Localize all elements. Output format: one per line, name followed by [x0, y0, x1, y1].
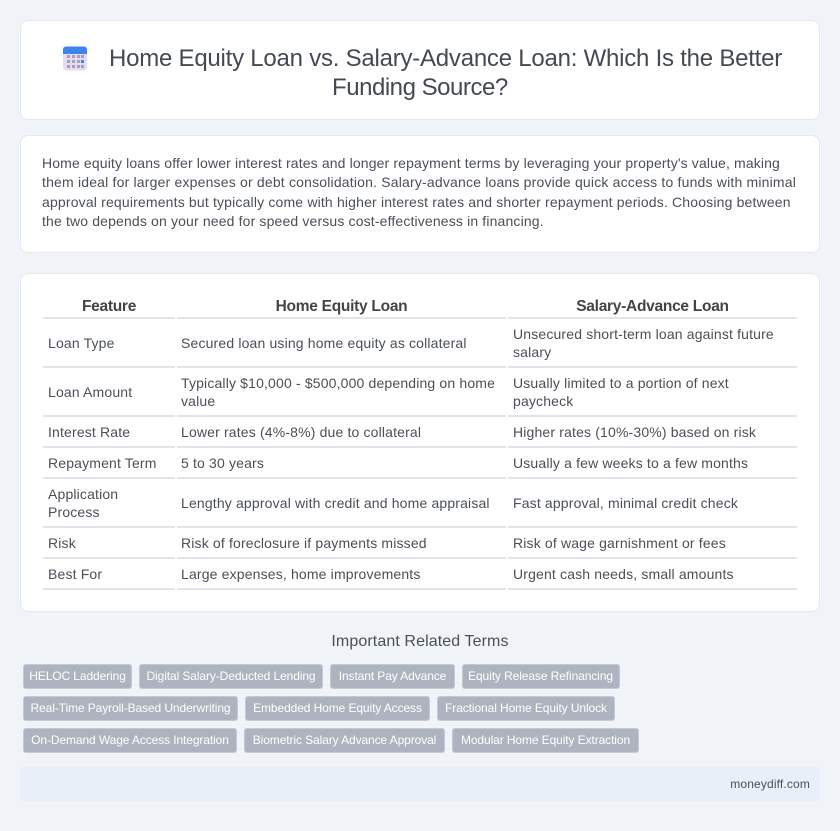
panel: summary [20, 135, 820, 253]
tag group: related terms: Digital Salary-Deducted Lending [146, 669, 316, 683]
table heading: home equity loan: Home Equity Loan [276, 298, 407, 315]
text: Usually limited to a portion of next [513, 375, 729, 391]
summary text: the two depends on your need for speed versus cost-effectiveness in financing. [42, 213, 544, 229]
summary text: approval requirements but typically come with higher interest rates and shorter repayment periods. Choosing between [42, 194, 791, 210]
text: paycheck [513, 393, 573, 409]
tag group: related terms: Biometric Salary Advance Approval [253, 733, 436, 747]
table heading: salary-advance loan: Salary-Advance Loan [576, 298, 729, 315]
heading: related terms: Important Related Terms [331, 633, 509, 650]
title [109, 45, 782, 101]
text: Lengthy approval with credit and home appraisal [181, 495, 490, 511]
tag group: related terms: Fractional Home Equity Unlock [445, 701, 607, 715]
row: repayment term: Repayment Term [48, 455, 157, 471]
row: application process [48, 486, 118, 520]
row: best for: Best For [48, 566, 102, 582]
text: Usually a few weeks to a few months [513, 455, 748, 471]
summary text: them ideal for larger expenses or debt consolidation. Salary-advance loans provide quick access to funds with minimal [42, 174, 796, 190]
row: application process: Application [48, 486, 118, 502]
row: loan amount: Loan Amount [48, 384, 132, 400]
title: Funding Source? [332, 74, 508, 101]
text: value [181, 393, 215, 409]
footer source: moneydiff.com [730, 777, 810, 791]
text: Secured loan using home equity as collateral [181, 335, 467, 351]
row: application process: Process [48, 504, 100, 520]
row: loan type: Loan Type [48, 335, 115, 351]
panel: header [20, 20, 820, 120]
text: Urgent cash needs, small amounts [513, 566, 734, 582]
text: Risk of wage garnishment or fees [513, 535, 726, 551]
tag group: related terms: Real-Time Payroll-Based Underwriting [30, 701, 231, 715]
tag group: related terms: Modular Home Equity Extraction [461, 733, 630, 747]
text: Large expenses, home improvements [181, 566, 421, 582]
tag group: related terms: On-Demand Wage Access Integration [31, 733, 229, 747]
footer [20, 767, 820, 801]
tag group: related terms: Embedded Home Equity Access [253, 701, 422, 715]
text: Fast approval, minimal credit check [513, 495, 738, 511]
summary text [42, 155, 796, 229]
tag group: related terms: Equity Release Refinancing [468, 669, 613, 683]
tag group: related terms [23, 664, 639, 753]
text: Unsecured short-term loan against future [513, 326, 774, 342]
text: salary [513, 344, 551, 360]
panel: comparison table [20, 273, 820, 612]
tag group: related terms: Instant Pay Advance [339, 669, 446, 683]
table heading: feature: Feature [82, 298, 136, 315]
text: Risk of foreclosure if payments missed [181, 535, 427, 551]
summary text: Home equity loans offer lower interest rates and longer repayment terms by leveraging your property's value, making [42, 155, 780, 171]
text: Typically $10,000 - $500,000 depending on home [181, 375, 495, 391]
tag group: related terms: HELOC Laddering [29, 669, 126, 683]
text: 5 to 30 years [181, 455, 264, 471]
text: Lower rates (4%-8%) due to collateral [181, 424, 421, 440]
row: risk: Risk [48, 535, 76, 551]
text: Higher rates (10%-30%) based on risk [513, 424, 756, 440]
row: interest rate: Interest Rate [48, 424, 130, 440]
icon: calendar [63, 46, 87, 70]
title: Home Equity Loan vs. Salary-Advance Loan: Which Is the Better [109, 45, 782, 72]
